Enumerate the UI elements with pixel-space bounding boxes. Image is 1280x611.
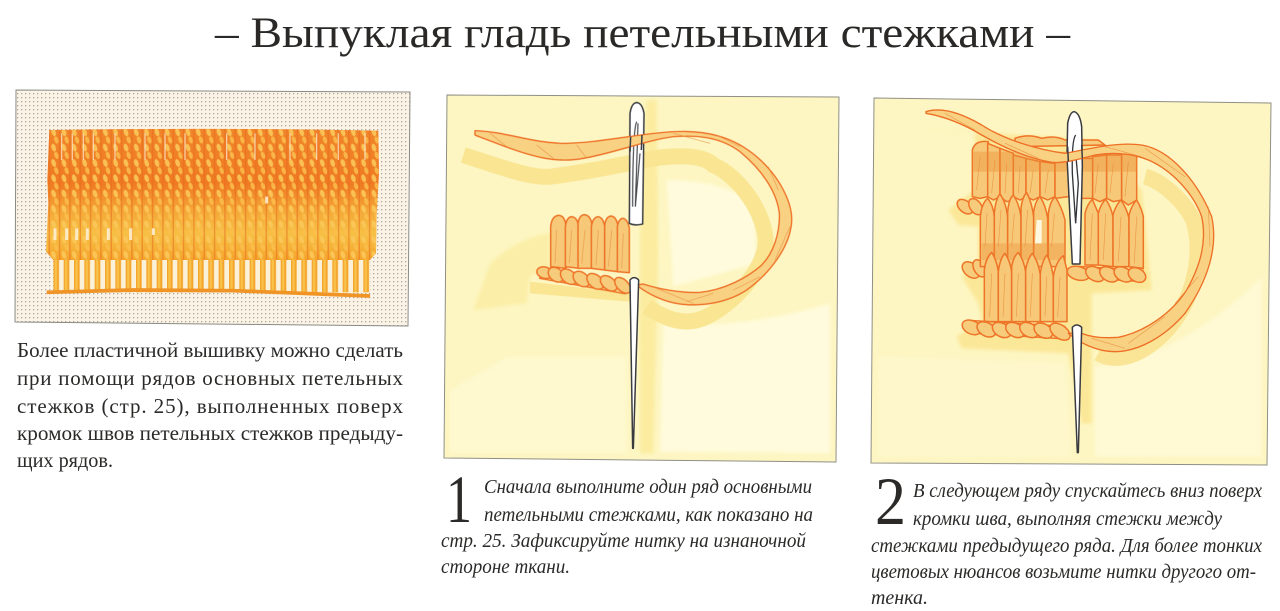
twisted strand body — [46, 129, 379, 260]
needle point part — [1072, 325, 1082, 453]
panel: step 2 illustration — [871, 98, 1271, 465]
step text: тенка. — [871, 588, 928, 609]
fabric background — [15, 90, 410, 326]
step number: 1 — [446, 461, 472, 537]
left description text: щих рядов. — [17, 448, 113, 472]
step 1 caption — [441, 461, 813, 578]
rope shadow — [530, 282, 630, 302]
step number: 2 — [875, 463, 906, 539]
step text: стежками предыдущего ряда. Для более тонких — [871, 536, 1262, 557]
step text: стороне ткани. — [441, 557, 570, 578]
top gaps between strands — [62, 133, 365, 160]
panel background — [444, 95, 839, 462]
vertical shadow — [639, 100, 658, 453]
panel background — [871, 98, 1271, 465]
step text: цветовых нюансов возьмите нитки другого от- — [871, 562, 1256, 583]
needle over thread at eye — [630, 135, 642, 152]
embroidered stitches — [46, 129, 379, 296]
thread shadow — [463, 155, 766, 321]
left description text: кромок швов петельных стежков предыду- — [17, 421, 403, 445]
step text — [441, 477, 813, 578]
pale wash patches — [878, 277, 1262, 457]
stitch shadow — [920, 128, 1152, 423]
left description text: Более пластичной вышивку можно сделать — [17, 338, 403, 362]
left description text: при помощи рядов основных петельных — [17, 366, 404, 390]
step text: В следующем ряду спускайтесь вниз поверх — [913, 481, 1262, 502]
thread — [475, 131, 792, 305]
pale wash patches — [450, 180, 830, 453]
needle eye slot — [1072, 135, 1078, 223]
strand base colour — [46, 129, 379, 260]
middle row of stitches — [980, 193, 1143, 268]
middle rope edge — [1066, 263, 1148, 285]
bottom rope edge — [960, 317, 1073, 344]
needle point part — [630, 278, 639, 448]
step 2 caption — [871, 463, 1262, 609]
step text — [871, 481, 1262, 609]
needle eye part — [629, 103, 644, 225]
thread shadow — [1098, 177, 1197, 358]
bottom bar — [47, 290, 370, 296]
step text: Сначала выполните один ряд основными — [484, 477, 812, 498]
panel: step 1 illustration — [444, 95, 839, 462]
stitch legs — [53, 255, 370, 292]
left rope bits — [954, 196, 989, 282]
panel: embroidery photo — [15, 90, 410, 326]
step text: петельными стежками, как показано на — [484, 505, 813, 526]
needle strip over thread — [1068, 145, 1082, 162]
needle eye slot — [633, 122, 640, 207]
step text: кромки шва, выполняя стежки между — [913, 509, 1222, 530]
left description text — [17, 338, 404, 472]
fabric gaps row — [55, 197, 267, 240]
rope edge — [535, 264, 634, 296]
stitches — [551, 215, 629, 273]
top row of stitches — [972, 136, 1137, 205]
step text: стр. 25. Зафиксируйте нитку на изнаночной — [441, 531, 806, 552]
left description text: стежков (стр. 25), выполненных поверх — [17, 394, 404, 418]
bottom row of stitches — [984, 252, 1067, 322]
needle eye part — [1067, 112, 1082, 264]
left wash — [473, 233, 550, 310]
thread — [926, 110, 1214, 352]
title: – Выпуклая гладь петельными стежками – — [214, 10, 1071, 57]
